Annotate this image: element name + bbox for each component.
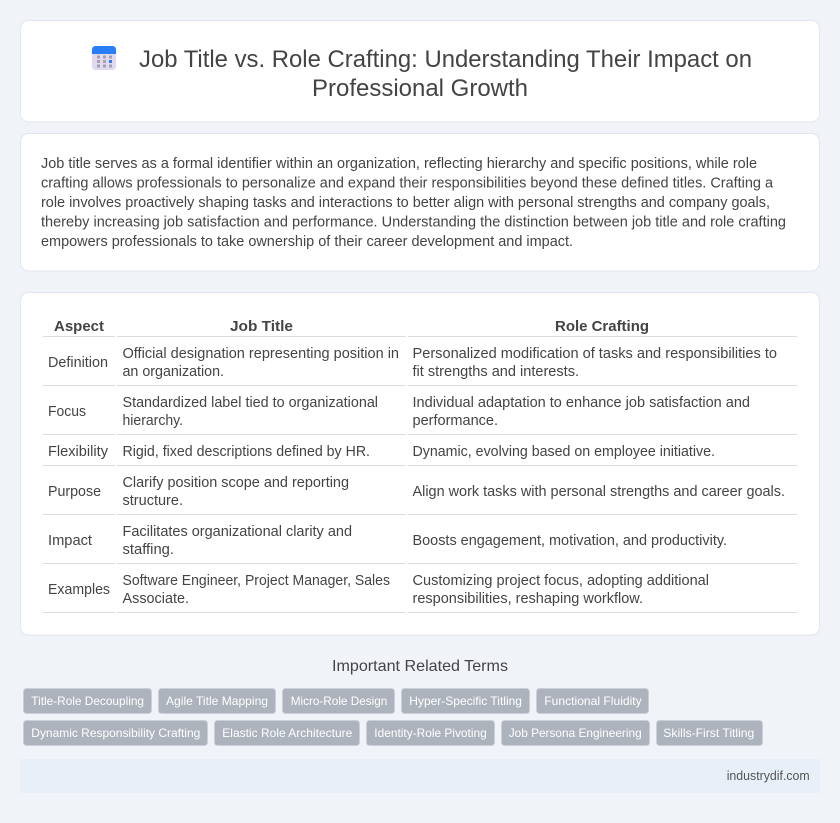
summary text block: crafting allows professionals to personalize and expand their responsibilities beyond these defined titles. Crafting a <box>41 176 774 192</box>
row: definition: fit strengths and interests. <box>412 364 579 380</box>
panel: comparison table <box>20 292 820 635</box>
chip <box>282 688 394 714</box>
title <box>139 46 752 102</box>
footer: industrydif.com <box>727 769 810 783</box>
row: focus <box>48 395 750 429</box>
row: purpose: Align work tasks with personal strengths and career goals. <box>412 484 785 500</box>
row: focus: hierarchy. <box>122 413 183 429</box>
chip: Micro-Role Design <box>291 694 387 708</box>
chip <box>502 720 650 746</box>
row: purpose: Purpose <box>48 484 101 500</box>
summary text block: role involves proactively shaping tasks and interactions to better align with personal strengths and company goals, <box>41 195 770 211</box>
row: focus: performance. <box>412 413 498 429</box>
row: examples <box>48 573 709 607</box>
chip: Hyper-Specific Titling <box>409 694 522 708</box>
summary text block: thereby increasing job satisfaction and performance. Understanding the distinction between job title and role crafting <box>41 214 786 230</box>
footer <box>20 759 820 793</box>
chip <box>214 720 360 746</box>
row: flexibility: Dynamic, evolving based on employee initiative. <box>412 444 715 460</box>
summary text block: Job title serves as a formal identifier within an organization, reflecting hierarchy and specific positions, while role <box>41 156 757 172</box>
row: impact: Boosts engagement, motivation, and productivity. <box>412 533 727 549</box>
chip <box>24 720 208 746</box>
chip <box>656 720 762 746</box>
chip <box>366 720 494 746</box>
chip <box>158 688 276 714</box>
heading: related terms: Important Related Terms <box>332 658 508 675</box>
row: examples: Associate. <box>122 591 189 607</box>
title: Job Title vs. Role Crafting: Understanding Their Impact on <box>139 46 752 73</box>
chip: Functional Fluidity <box>544 694 642 708</box>
table header row: Aspect <box>54 318 104 335</box>
row: purpose: Clarify position scope and reporting <box>122 475 349 491</box>
table header row: Role Crafting <box>555 318 649 335</box>
chip: Agile Title Mapping <box>166 694 268 708</box>
row: purpose: structure. <box>122 493 183 509</box>
summary text block: empowers professionals to take ownership of their career development and impact. <box>41 234 573 250</box>
row: definition <box>48 346 777 380</box>
row: examples: Examples <box>48 582 110 598</box>
chip: Skills-First Titling <box>663 726 754 740</box>
chip: Job Persona Engineering <box>509 726 642 740</box>
row: focus: Standardized label tied to organizational <box>122 395 378 411</box>
row: definition: Personalized modification of tasks and responsibilities to <box>412 346 777 362</box>
row: impact: staffing. <box>122 542 174 558</box>
row: impact <box>48 524 727 558</box>
chip: Elastic Role Architecture <box>222 726 353 740</box>
row: purpose <box>48 475 785 509</box>
row: flexibility <box>48 444 715 460</box>
chip: Identity-Role Pivoting <box>374 726 487 740</box>
row: flexibility: Rigid, fixed descriptions defined by HR. <box>122 444 370 460</box>
row: impact: Impact <box>48 533 92 549</box>
table header row: Job Title <box>230 318 293 335</box>
panel: summary card <box>20 134 820 271</box>
row: examples: responsibilities, reshaping workflow. <box>412 591 643 607</box>
chip <box>536 688 648 714</box>
chip <box>402 688 530 714</box>
table header row <box>54 318 649 335</box>
panel: header card <box>20 20 820 122</box>
row: examples: Software Engineer, Project Manager, Sales <box>122 573 390 589</box>
row: focus: Individual adaptation to enhance job satisfaction and <box>412 395 750 411</box>
row: examples: Customizing project focus, adopting additional <box>412 573 709 589</box>
row: flexibility: Flexibility <box>48 444 109 460</box>
chip <box>24 688 152 714</box>
chip: Title-Role Decoupling <box>31 694 144 708</box>
related term chips <box>24 688 762 746</box>
chip: Dynamic Responsibility Crafting <box>31 726 200 740</box>
row: impact: Facilitates organizational clarity and <box>122 524 352 540</box>
row: definition: Official designation representing position in <box>122 346 399 362</box>
title: Professional Growth <box>312 75 528 102</box>
row: focus: Focus <box>48 404 86 420</box>
summary text block <box>41 156 786 250</box>
row: definition: Definition <box>48 355 108 371</box>
icon: calendar <box>92 46 116 70</box>
row: definition: an organization. <box>122 364 224 380</box>
